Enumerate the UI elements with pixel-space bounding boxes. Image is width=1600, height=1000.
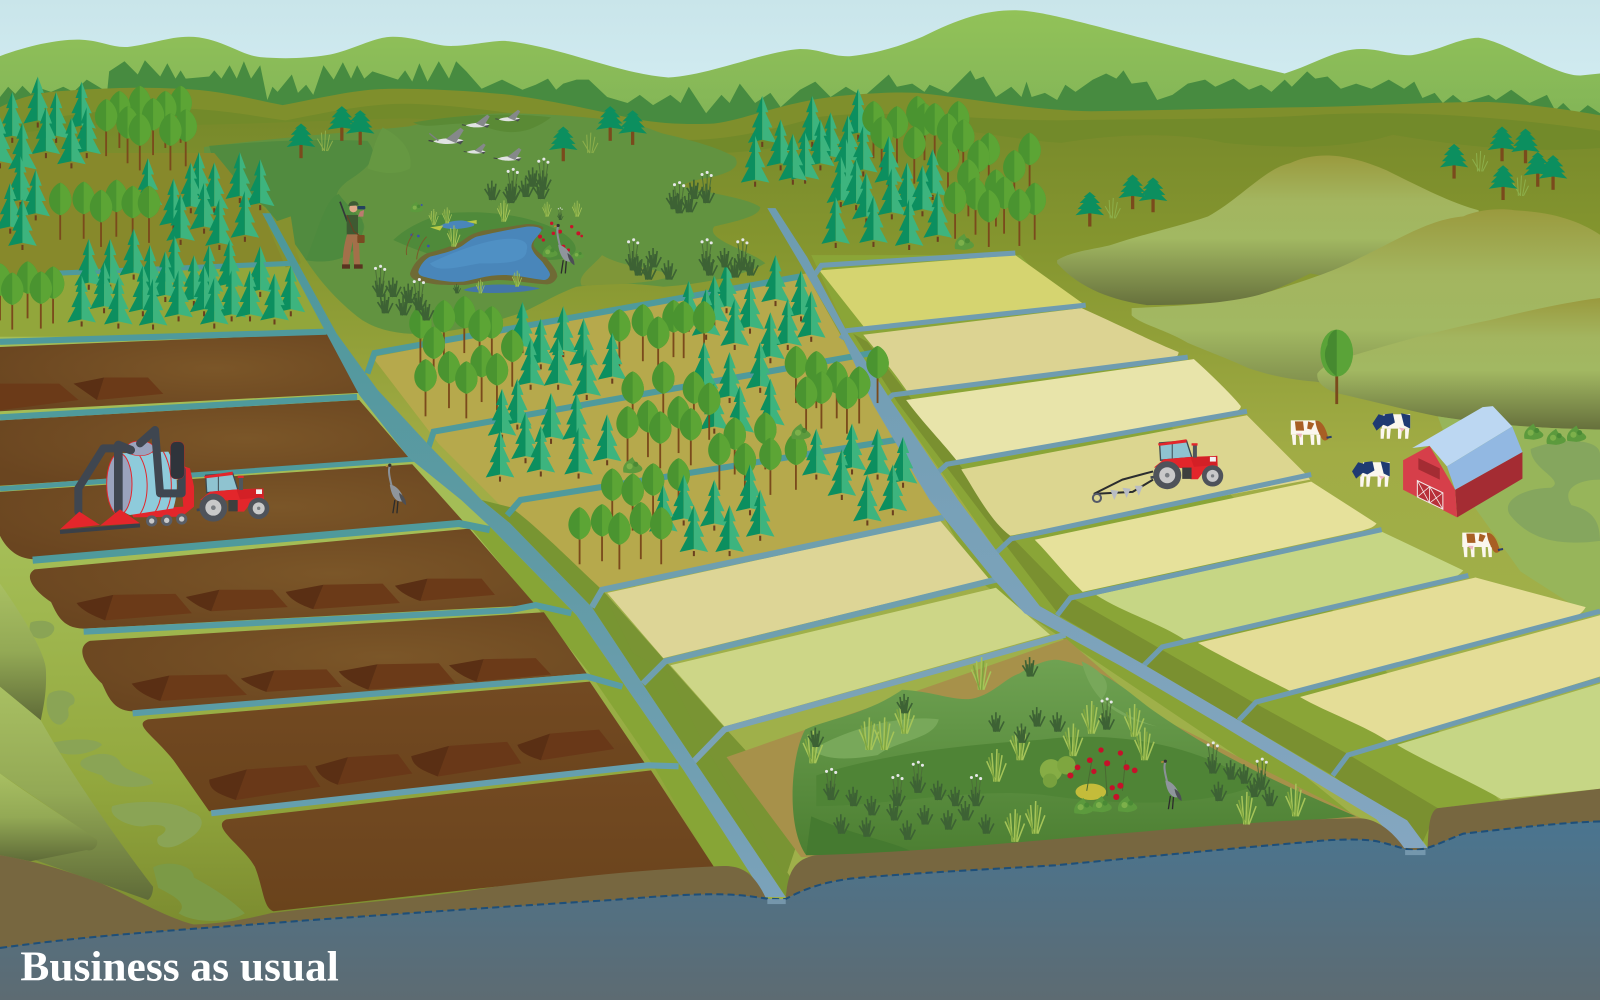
tractor xyxy=(197,472,269,522)
centre fields xyxy=(607,520,1050,727)
bushes xyxy=(623,234,1586,473)
crane on peat field xyxy=(386,464,406,513)
pond and wetland plants xyxy=(393,200,584,293)
far hills xyxy=(0,10,1600,143)
suction nozzles xyxy=(60,509,140,532)
sky xyxy=(0,0,1600,143)
right fields xyxy=(819,255,1600,799)
cows xyxy=(1291,413,1503,557)
forest: upper left xyxy=(0,77,305,330)
lower wetland plants xyxy=(803,657,1305,842)
left lower lawn xyxy=(0,337,765,959)
left field drains xyxy=(0,263,903,813)
forest: centre plantation xyxy=(409,255,917,569)
upper meadow tussocks xyxy=(372,158,758,320)
harvester body xyxy=(130,465,194,517)
red barn xyxy=(1403,406,1522,517)
water blobs on lawn xyxy=(30,621,245,921)
forest: upper centre xyxy=(741,89,1046,250)
tractor with plough xyxy=(1093,439,1223,502)
lawn right of barn xyxy=(1438,416,1600,622)
crane at pond xyxy=(554,224,574,273)
crane in wetland xyxy=(1161,760,1182,809)
distant tree line xyxy=(0,60,1600,143)
canal outlets xyxy=(767,850,1426,904)
title: Business as usual xyxy=(20,945,339,991)
lower wetland xyxy=(727,639,1367,857)
centre field drains xyxy=(592,517,1065,761)
peat mounds xyxy=(0,378,614,800)
flying geese xyxy=(429,110,521,161)
harvester drum xyxy=(107,441,177,515)
left hills xyxy=(0,584,153,900)
main canal one xyxy=(262,213,786,897)
embankment right of canal two xyxy=(811,255,1500,847)
shore xyxy=(0,789,1600,959)
right field drains xyxy=(814,253,1600,776)
lake xyxy=(0,821,1600,1000)
lawn beside canal xyxy=(337,337,796,898)
main canal two xyxy=(767,208,1428,848)
forest floor centre xyxy=(372,273,944,592)
suction hoses xyxy=(78,430,184,512)
wildflower patch xyxy=(1040,747,1138,814)
peat harvester with tractor xyxy=(60,430,269,532)
forest floor left xyxy=(0,153,332,345)
shoreline dashed waterline xyxy=(0,821,1600,948)
small tree clusters xyxy=(287,106,1567,227)
brown peat fields xyxy=(0,334,714,911)
embankment left of canal two xyxy=(482,500,1367,897)
harvester wheels xyxy=(146,513,187,527)
birdwatcher xyxy=(340,201,365,269)
upper wetland meadow xyxy=(204,113,765,334)
right hills xyxy=(1057,155,1600,430)
lone tree xyxy=(1320,330,1353,404)
